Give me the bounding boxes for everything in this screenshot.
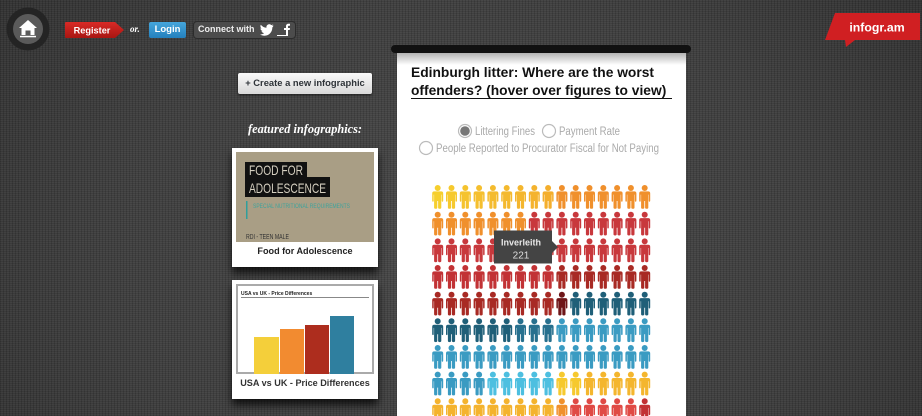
create infographic button — [238, 73, 372, 94]
radio: payment rate — [542, 124, 620, 138]
row 7 — [432, 345, 650, 369]
logo: infogr.am — [825, 13, 920, 47]
login button — [149, 22, 186, 38]
row 4 — [432, 265, 650, 289]
register button — [65, 22, 124, 38]
row 3 — [432, 238, 650, 262]
logo: infogr.am: infogr.am — [849, 20, 905, 34]
thumbnail: food for adolescence: FOOD FOR — [249, 162, 303, 178]
icon: twitter — [260, 24, 274, 36]
create infographic button: + Create a new infographic — [245, 77, 365, 88]
radio: littering fines: Littering Fines — [475, 126, 535, 138]
register button: Register — [74, 26, 111, 36]
thumbnail: food for adolescence: ADOLESCENCE — [249, 180, 326, 196]
row 9 — [432, 398, 650, 416]
card caption: USA vs UK - Price Differences — [240, 378, 370, 388]
radio: payment rate: Payment Rate — [559, 126, 620, 138]
thumbnail: bar chart: USA vs UK - Price Differences — [241, 291, 312, 297]
row 1 — [432, 185, 650, 209]
icon: facebook — [277, 24, 290, 36]
row 8 — [432, 372, 650, 395]
card: food for adolescence — [232, 148, 378, 267]
tooltip: Inverleith 221 — [494, 230, 558, 264]
connect with label: Connect with — [198, 24, 254, 34]
tooltip: Inverleith 221: Inverleith — [501, 238, 541, 248]
row 6 — [432, 318, 650, 342]
featured heading: featured infographics: — [248, 121, 362, 136]
thumbnail: food for adolescence: RDI - TEEN MALE — [246, 234, 289, 241]
connect with panel — [194, 22, 295, 38]
title — [411, 64, 672, 99]
thumbnail: food for adolescence — [236, 152, 374, 242]
paper sheet — [397, 49, 686, 416]
panel: infographic paper — [391, 45, 691, 416]
title: offenders? (hover over figures to view) — [411, 82, 666, 98]
login button: Login — [155, 24, 180, 35]
radio options — [418, 124, 659, 156]
icon: home button — [6, 8, 50, 50]
top roller bar — [391, 45, 691, 53]
card caption: Food for Adolescence — [257, 246, 353, 256]
or label: or. — [130, 24, 140, 34]
row 2 — [432, 212, 650, 236]
title: Edinburgh litter: Where are the worst — [411, 65, 654, 80]
thumbnail: bar chart — [236, 284, 374, 374]
card: usa vs uk — [232, 280, 378, 399]
row 5 — [432, 292, 650, 316]
radio: littering fines — [458, 124, 535, 138]
tooltip: Inverleith 221: 221 — [513, 250, 530, 262]
